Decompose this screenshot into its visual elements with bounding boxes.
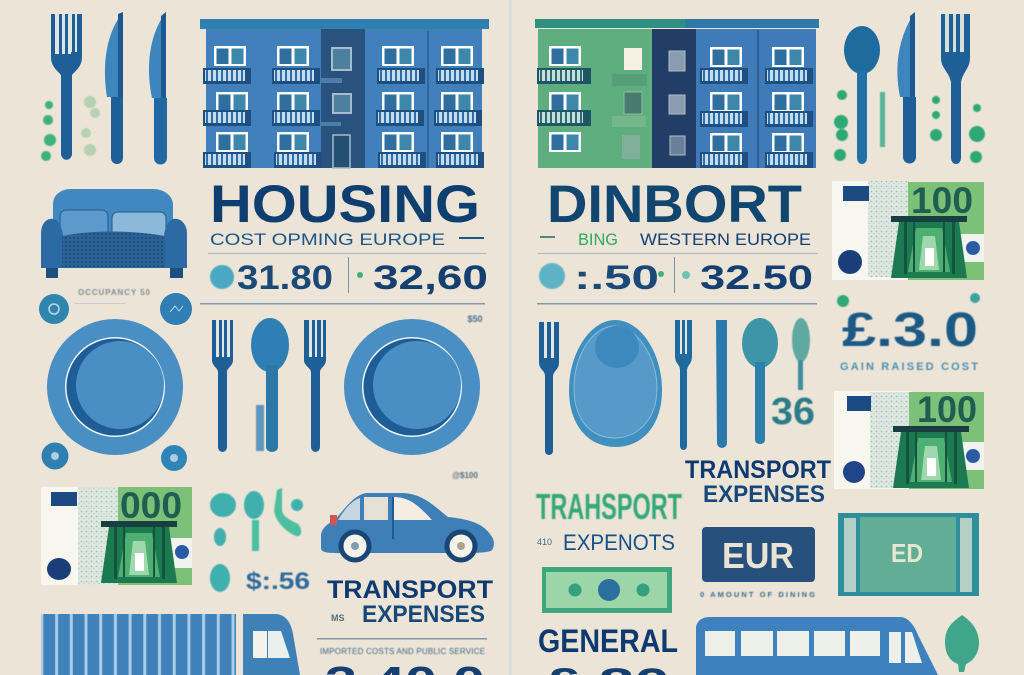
balconies: housing [203, 68, 484, 168]
windows: housing [214, 46, 473, 168]
icon: badge left [39, 294, 69, 324]
icon: left fork [51, 14, 82, 160]
balconies: dinbort [537, 68, 813, 168]
icon: dining fork [539, 322, 559, 455]
subheading: left expenses: EXPENSES [362, 601, 485, 628]
icon: car [321, 493, 494, 560]
icon: small badge lower left [42, 442, 68, 470]
heading: general: GENERAL [538, 623, 678, 659]
icon: plate right [344, 319, 480, 455]
icon: green herbs left [41, 96, 100, 161]
icons: green herbs right [834, 90, 985, 163]
badge: EUR [702, 527, 815, 582]
icon: dining spoon [742, 318, 778, 444]
figure: left dining price: :.50 [574, 259, 659, 297]
heading: housing: HOUSING [210, 175, 480, 234]
caption: fine print: IMPORTED COSTS AND PUBLIC SERVICE [320, 647, 485, 656]
caption: faint sofa label: OCCUPANCY 50 [78, 288, 151, 297]
subheading: right expenses: EXPENSES [703, 481, 825, 508]
figure: right housing price: 32,60 [373, 259, 488, 297]
figure: blurred price: £.3.0 [842, 304, 978, 357]
icon: banknote lower right [834, 389, 984, 489]
heading: dinbort: DINBORT [547, 175, 802, 234]
icon: bus [696, 617, 938, 675]
figure: teal number: 36 [771, 391, 815, 433]
icon: banknote lower right: 100 [917, 389, 977, 430]
icon: dining fork two [675, 320, 692, 450]
icon: teal note: ED [891, 538, 923, 568]
icon: badge right [160, 293, 192, 325]
subheading: western europe: WESTERN EUROPE [640, 230, 811, 249]
icon: banknote left [41, 485, 192, 585]
figure: left housing price: 31.80 [237, 259, 333, 297]
icon: right fork [941, 14, 970, 164]
icon: banknote upper right [832, 180, 984, 280]
icon: banknote upper right: 100 [911, 180, 973, 221]
icon: right knife [897, 12, 916, 164]
icon: teal globe right [539, 263, 565, 289]
icon: plate left [47, 319, 183, 455]
figure: right dining price: 32.50 [700, 259, 813, 297]
caption: blurred label: GAIN RAISED COST [840, 361, 978, 373]
icons: teal blobs [210, 488, 303, 592]
windows: dinbort [549, 46, 804, 159]
heading: green transport: TRAHSPORT [536, 486, 682, 527]
icon: green leaf [945, 615, 979, 672]
icon: small badge lower right [161, 445, 187, 471]
icon: left knife two [149, 12, 167, 164]
icon: teal note [838, 513, 979, 596]
subheading: western europe [540, 230, 811, 249]
icon: right spoon [844, 26, 880, 164]
icon: green note [542, 567, 672, 613]
icon: banknote left: 000 [120, 485, 182, 526]
icon: small spoon [792, 318, 810, 390]
building: dinbort [535, 19, 819, 168]
icon: centre fork [212, 320, 233, 452]
icon: teal globe [210, 265, 234, 289]
icon: dining knife [716, 320, 727, 448]
caption: small number: 410 [537, 537, 552, 547]
subheading: housing: COST OPMING EUROPE [210, 230, 445, 249]
icons: green dots [837, 293, 980, 307]
caption: faint price: @$100 [452, 471, 478, 480]
icon: centre fork right [304, 320, 326, 452]
icon: truck [41, 614, 300, 675]
caption: faint text: $50 [467, 314, 483, 324]
icon: left knife one [105, 12, 123, 164]
icon: egg plate [569, 320, 662, 447]
caption: faint label: MS [331, 613, 344, 623]
icon: sofa [41, 189, 187, 278]
heading: right transport: TRANSPORT [685, 456, 831, 484]
icon: centre spoon [251, 318, 289, 452]
building: housing [200, 19, 489, 168]
figure: teal price: $:.56 [246, 568, 310, 595]
subheading: western europe: BING [578, 230, 618, 249]
caption: fine print under EUR: 0 AMOUNT OF DINING [700, 590, 815, 599]
subheading: expenots: EXPENOTS [563, 530, 675, 555]
heading: left transport: TRANSPORT [327, 576, 493, 604]
badge: EUR: EUR [722, 535, 794, 576]
